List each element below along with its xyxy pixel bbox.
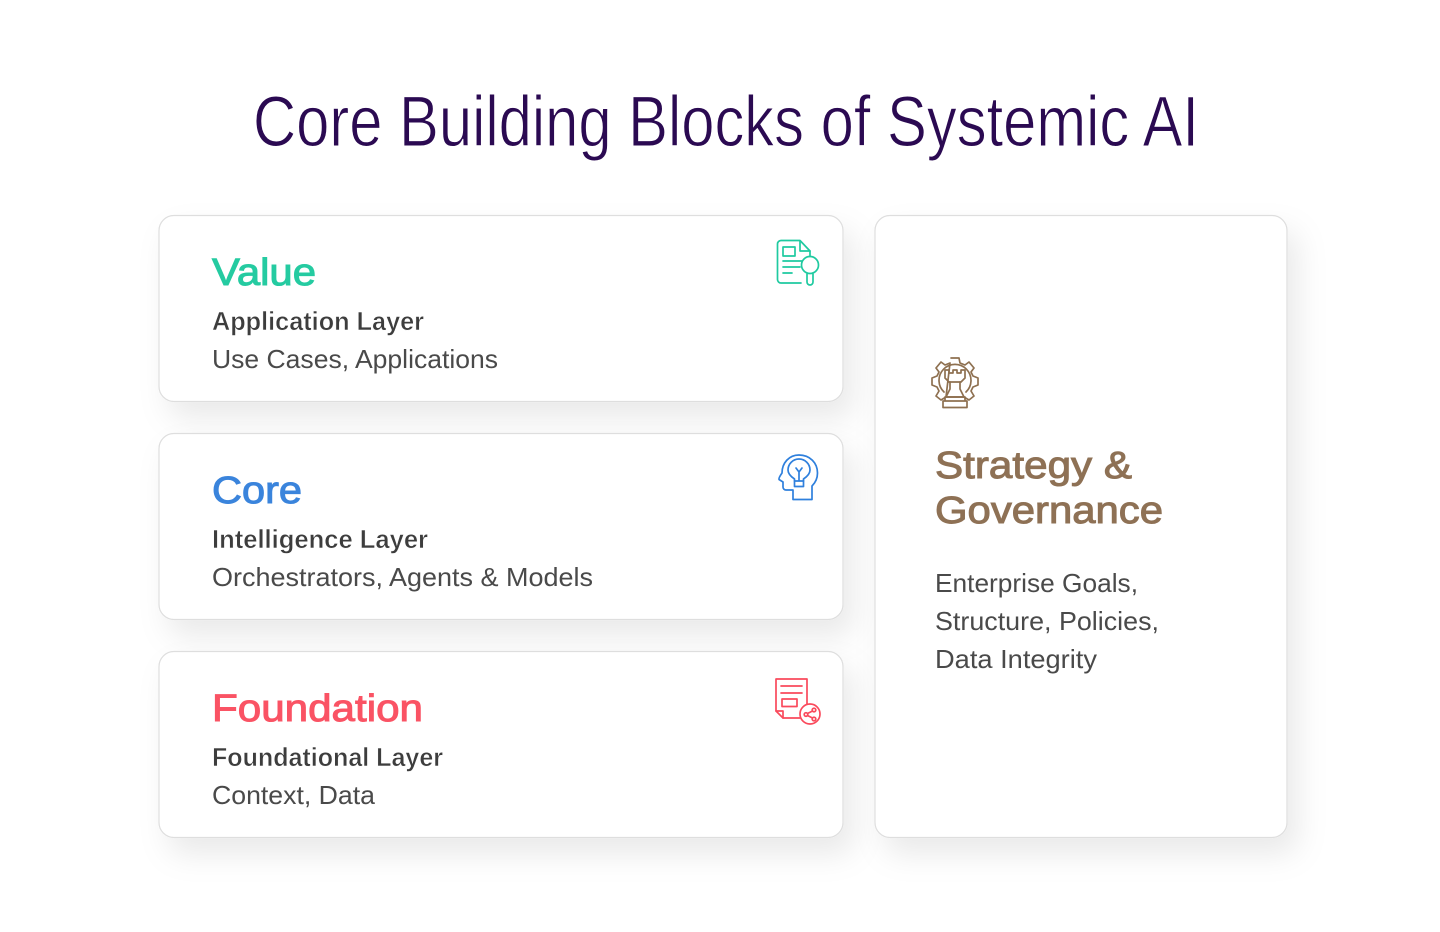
icon: chess rook in gear — [932, 358, 978, 408]
icon: document with magnifier — [778, 240, 818, 285]
text: orchestrators: Orchestrators, Agents & Models — [212, 562, 593, 592]
text: use cases: Use Cases, Applications — [212, 344, 498, 374]
panel: value — [159, 216, 843, 402]
heading: strategy and governance — [935, 445, 1163, 532]
text: strategy description: Data Integrity — [935, 644, 1097, 674]
text: strategy description: Enterprise Goals, — [935, 568, 1138, 598]
subheading: intelligence layer: Intelligence Layer — [212, 524, 428, 554]
panel: foundation — [159, 652, 843, 838]
heading: strategy and governance: Governance — [935, 490, 1163, 532]
subheading: application layer: Application Layer — [212, 306, 424, 336]
icon: head with light bulb — [779, 455, 818, 500]
text: strategy description: Structure, Policies, — [935, 606, 1159, 636]
text: strategy description — [935, 568, 1159, 674]
heading: foundation: Foundation — [212, 688, 423, 730]
title: Core Building Blocks of Systemic AI — [253, 83, 1199, 162]
text: context data: Context, Data — [212, 780, 376, 810]
icon: document with share symbol — [776, 679, 820, 724]
panel: core — [159, 434, 843, 620]
heading: core: Core — [212, 470, 302, 512]
subheading: foundational layer: Foundational Layer — [212, 742, 443, 772]
heading: value: Value — [212, 252, 316, 294]
panel: strategy and governance — [875, 216, 1287, 838]
heading: strategy and governance: Strategy & — [935, 445, 1132, 487]
